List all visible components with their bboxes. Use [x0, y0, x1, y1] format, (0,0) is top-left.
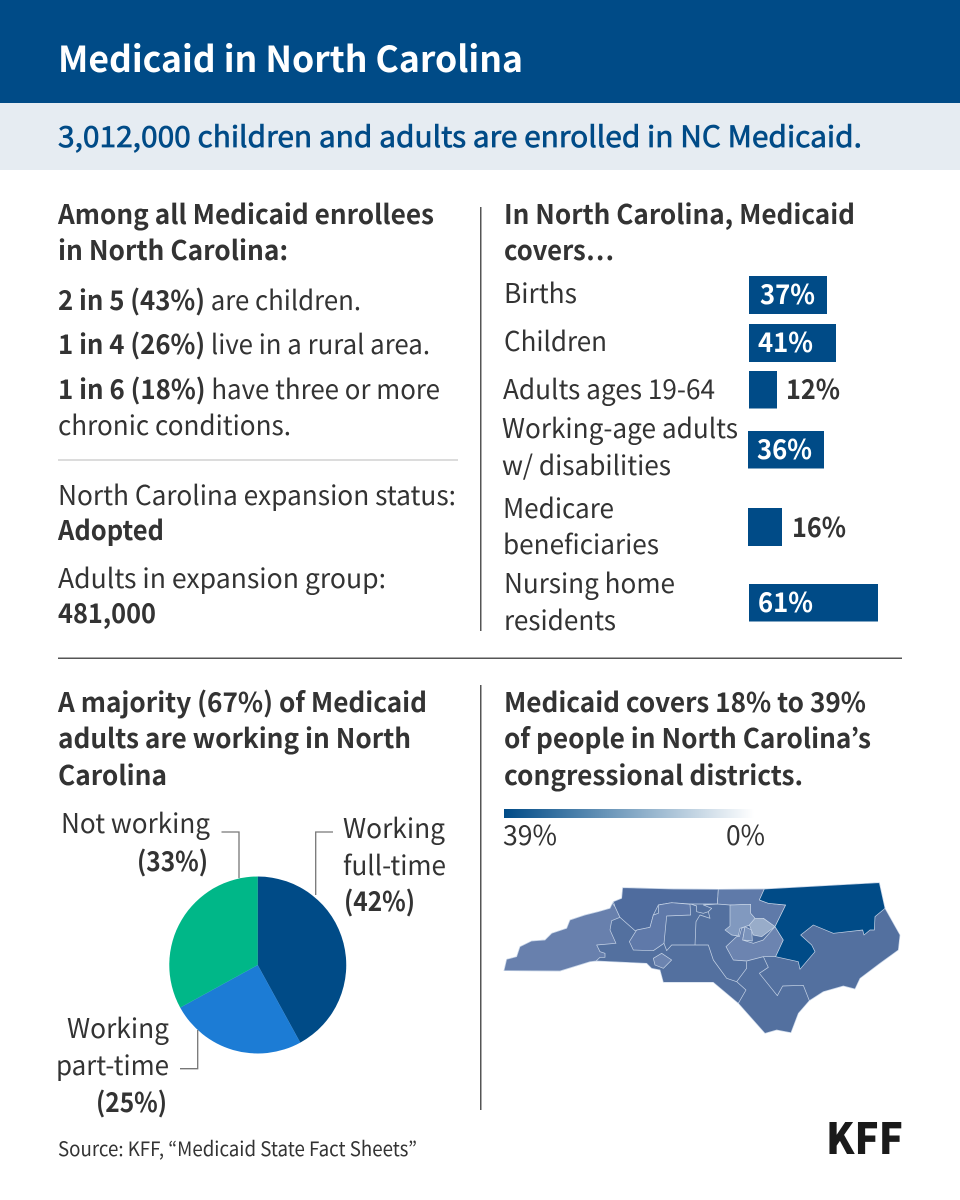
bar: births: Births — [504, 272, 577, 311]
bar: births: 37% — [760, 273, 815, 312]
map legend: 0% — [726, 814, 765, 853]
panel: enrollee statistics — [57, 193, 458, 631]
bar: adults 19-64 — [503, 368, 840, 408]
map legend: 39% — [503, 814, 557, 853]
heading: coverage: covers… — [504, 229, 614, 268]
title banner — [0, 0, 960, 103]
bar: nursing home residents — [504, 562, 878, 638]
heading: working adults: adults are working in North — [58, 717, 411, 756]
label: working full-time: full-time — [343, 844, 446, 883]
text: children share: 2 in 5 (43%) are children. — [58, 279, 361, 318]
label: working full-time: Working — [343, 807, 445, 846]
heading: coverage: In North Carolina, Medicaid — [504, 193, 855, 232]
logo: KFF: KFF — [826, 1105, 903, 1167]
heading: coverage — [504, 193, 855, 268]
bar: births — [504, 272, 827, 314]
map legend — [503, 809, 765, 853]
bar: working-age adults with disabilities: w/ disabilities — [502, 444, 671, 483]
text: expansion status: North Carolina expansion status: — [58, 474, 456, 513]
heading: enrollees: Among all Medicaid enrollees — [57, 193, 434, 232]
bar: medicare beneficiaries: 16% — [792, 506, 846, 545]
heading: district coverage — [504, 681, 871, 793]
heading: district coverage: Medicaid covers 18% to 39% — [504, 681, 866, 720]
label: working part-time — [56, 1007, 198, 1120]
label: working full-time — [316, 807, 446, 919]
bar: adults 19-64: 12% — [786, 368, 840, 407]
bar: children — [504, 320, 836, 362]
text: chronic conditions share: chronic conditions. — [58, 404, 291, 443]
subtitle band — [0, 103, 960, 170]
text: expansion status — [57, 474, 456, 548]
panel: district map — [503, 681, 900, 1033]
label: not working: (33%) — [137, 840, 208, 879]
pie chart — [169, 876, 346, 1053]
heading: enrollees — [57, 193, 434, 268]
bar: medicare beneficiaries — [503, 487, 846, 562]
heading: working adults — [57, 681, 427, 793]
heading: district coverage: congressional districts. — [504, 754, 803, 793]
text: expansion group: 481,000 — [58, 592, 156, 631]
text: expansion group — [58, 557, 386, 631]
panel: coverage bar chart — [502, 193, 878, 638]
heading: enrollees: in North Carolina: — [58, 229, 288, 268]
text: chronic conditions share: 1 in 6 (18%) have three or more — [58, 368, 440, 407]
text: chronic conditions share — [58, 368, 440, 443]
heading: working adults: Carolina — [58, 754, 167, 793]
panel: work status pie chart — [56, 681, 446, 1120]
bar: adults 19-64: Adults ages 19-64 — [503, 368, 715, 407]
title banner: Medicaid in North Carolina — [58, 31, 523, 83]
source note: Source: KFF, “Medicaid State Fact Sheets” — [58, 1133, 417, 1162]
bar: working-age adults with disabilities: 36% — [757, 428, 812, 467]
text: rural share: 1 in 4 (26%) live in a rural area. — [58, 323, 430, 362]
bar: children: 41% — [758, 321, 813, 360]
bar: medicare beneficiaries: Medicare — [503, 487, 614, 526]
label: working part-time: part-time — [56, 1044, 169, 1083]
heading: working adults: A majority (67%) of Medicaid — [57, 681, 427, 720]
subtitle band: 3,012,000 children and adults are enrolled in NC Medicaid. — [58, 114, 862, 156]
label: not working: Not working — [61, 802, 210, 841]
label: working part-time: Working — [67, 1007, 169, 1046]
bar: nursing home residents: residents — [504, 599, 616, 638]
label: working part-time: (25%) — [96, 1081, 167, 1120]
heading: district coverage: of people in North Carolina’s — [504, 717, 871, 756]
label: not working — [61, 802, 239, 879]
choropleth map of North Carolina — [504, 883, 900, 1033]
text: expansion group: Adults in expansion group: — [58, 557, 386, 596]
bar: working-age adults with disabilities — [502, 407, 824, 483]
text: expansion status: Adopted — [57, 509, 164, 548]
label: working full-time: (42%) — [344, 880, 415, 919]
bar: medicare beneficiaries: beneficiaries — [503, 523, 659, 562]
bar: children: Children — [504, 320, 607, 359]
bar: nursing home residents: 61% — [758, 581, 813, 620]
bar: working-age adults with disabilities: Working-age adults — [502, 407, 738, 446]
bar: nursing home residents: Nursing home — [504, 562, 675, 601]
